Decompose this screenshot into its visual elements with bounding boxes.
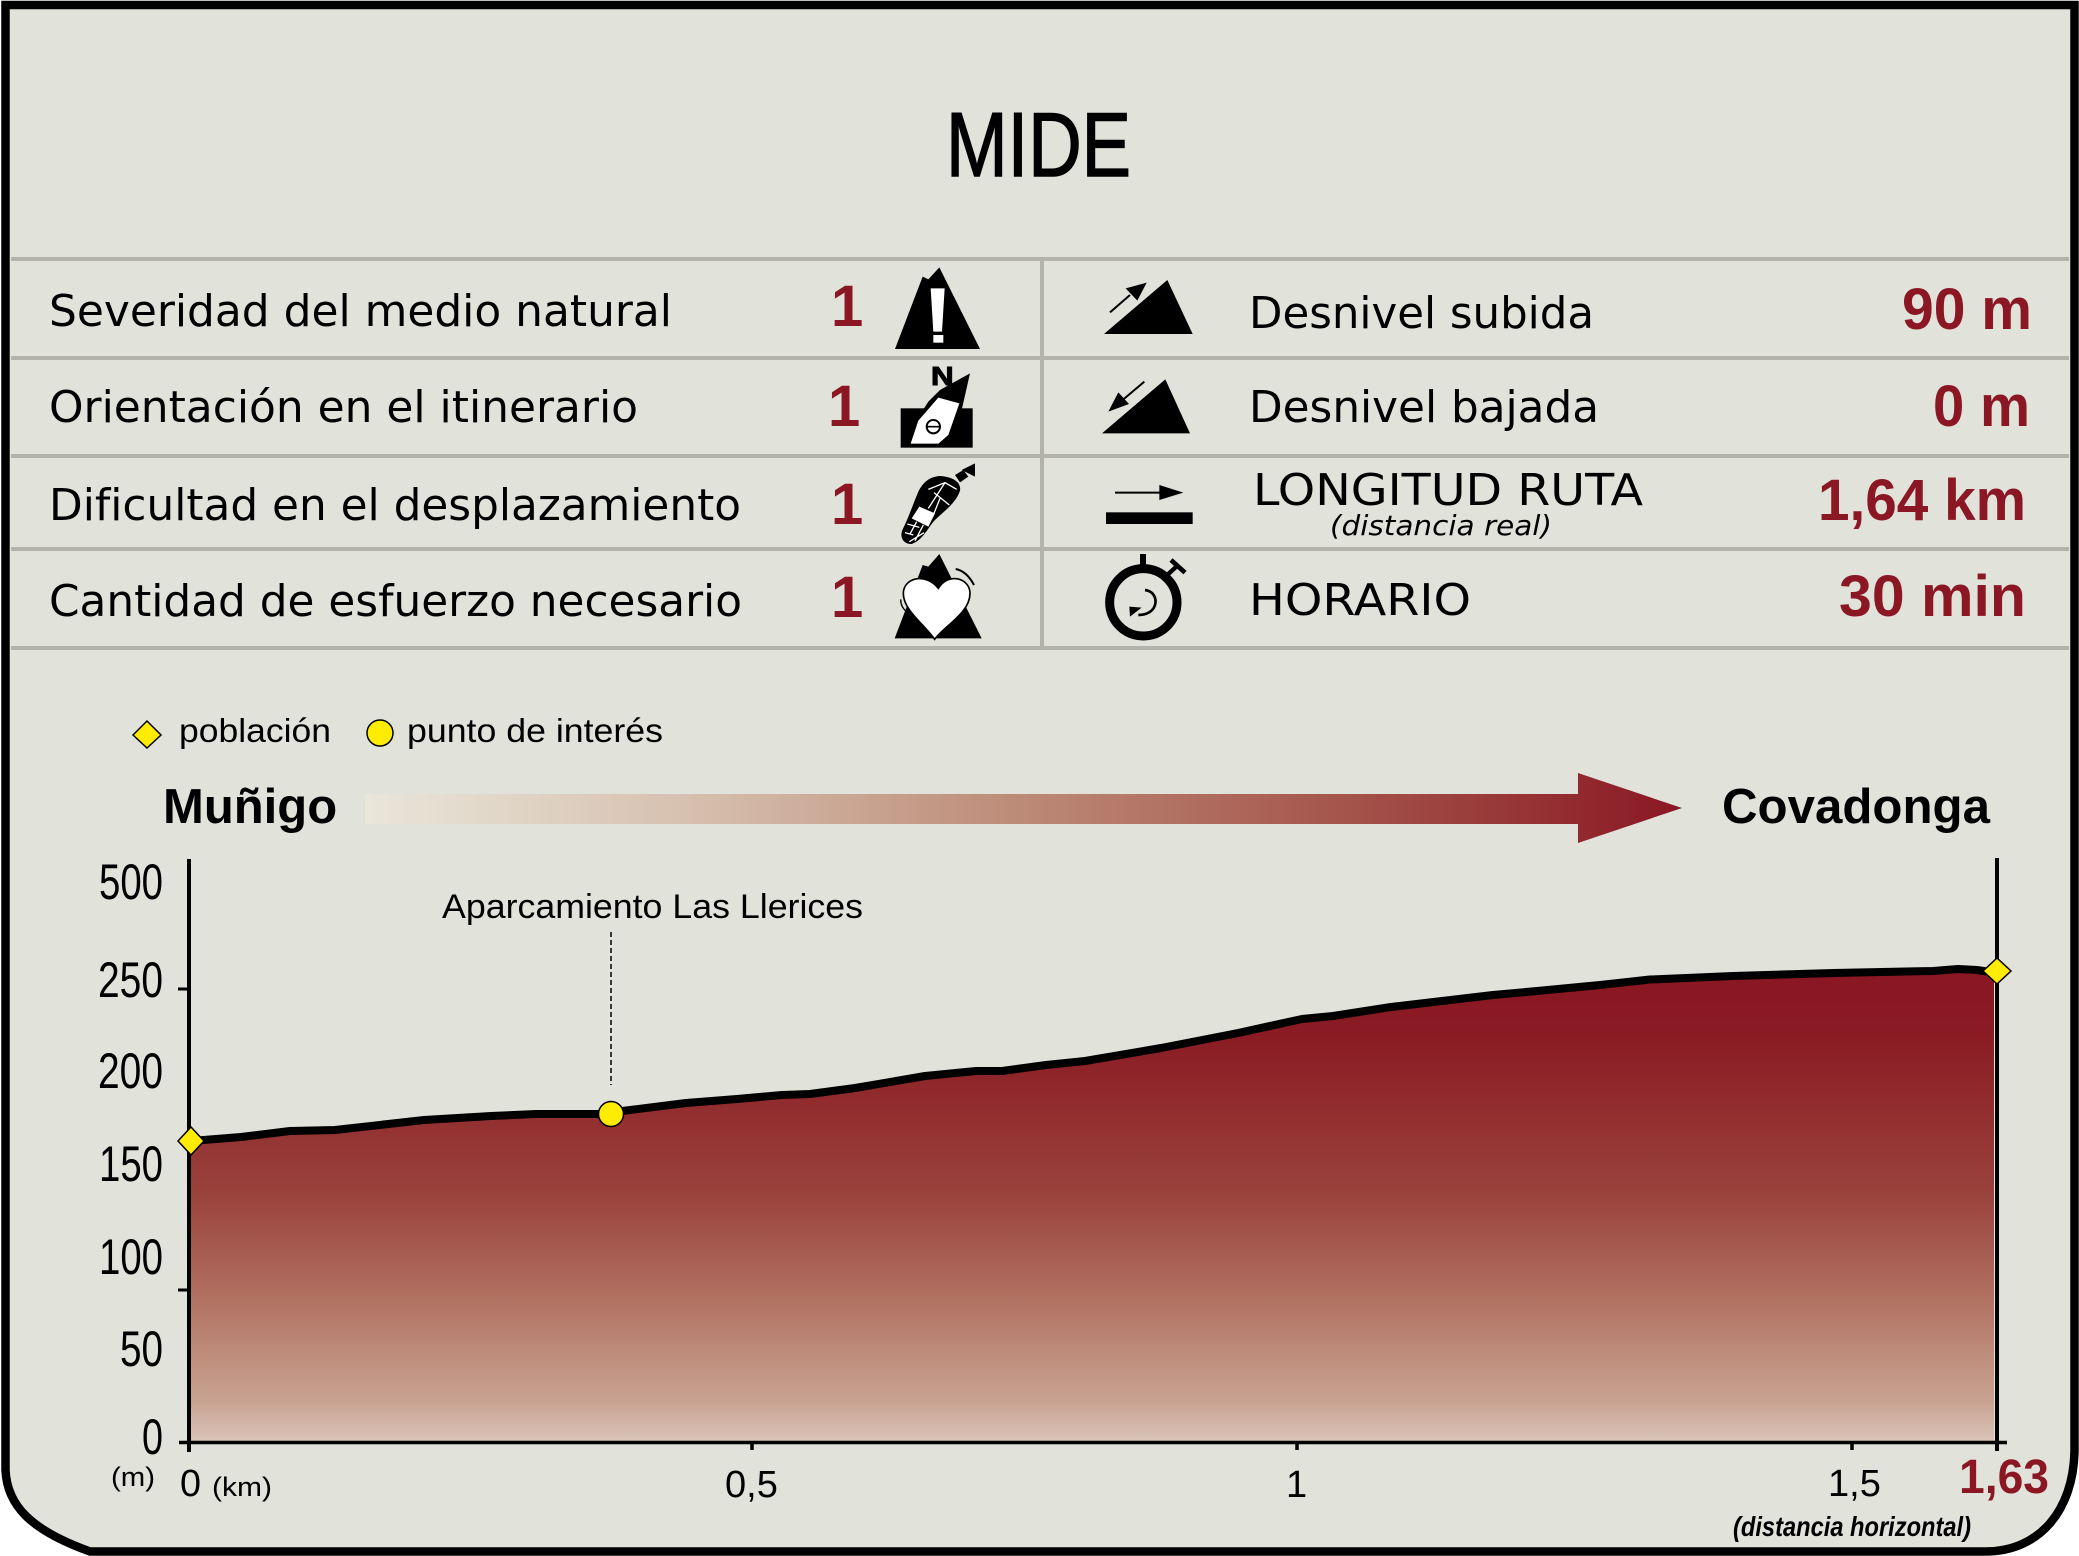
route destination: Covadonga	[1722, 780, 1991, 834]
x axis labels: 0,5	[725, 1464, 778, 1506]
value: longitud: 1,64 km	[1818, 468, 2026, 533]
panel: MIDE ratings	[49, 267, 982, 639]
profile area	[191, 969, 1994, 1441]
label: horario: HORARIO	[1249, 575, 1471, 626]
value: desnivel bajada: 0 m	[1933, 374, 2030, 439]
legend	[133, 712, 663, 749]
y axis labels: 50	[120, 1321, 163, 1377]
x axis labels: 0	[180, 1463, 201, 1505]
y axis labels: 500	[99, 854, 163, 910]
icon: compass: N	[931, 361, 954, 391]
icon: heart mountain	[895, 554, 982, 639]
label: desnivel bajada: Desnivel bajada	[1249, 382, 1599, 433]
y axis labels	[98, 854, 163, 1465]
x axis labels: 1	[1286, 1464, 1307, 1506]
y axis labels: 250	[98, 952, 163, 1008]
x axis labels: 1,5	[1828, 1463, 1881, 1505]
icon: point of interest	[367, 720, 393, 746]
arrow: route direction	[365, 773, 1682, 843]
route origin: Muñigo	[163, 780, 337, 834]
y axis labels: 150	[99, 1136, 163, 1192]
label: severidad: Severidad del medio natural	[49, 286, 672, 337]
marker: start town	[178, 1127, 204, 1155]
y axis labels: 0	[142, 1409, 163, 1465]
icon: boot sole	[901, 463, 975, 544]
label: orientacion: Orientación en el itinerario	[49, 382, 638, 433]
icon: population diamond	[133, 721, 161, 748]
label: longitud ruta: LONGITUD RUTA	[1253, 465, 1643, 516]
label: desnivel subida: Desnivel subida	[1249, 288, 1594, 339]
value: desnivel subida: 90 m	[1902, 277, 2032, 342]
label: dificultad: Dificultad en el desplazamiento	[49, 480, 741, 531]
label: distancia real: (distancia real)	[1330, 509, 1552, 542]
icon: descent	[1102, 379, 1190, 433]
axes	[178, 858, 2007, 1452]
icon: stopwatch	[1110, 554, 1185, 636]
title: MIDE	[946, 95, 1131, 196]
x axis labels	[180, 1463, 1881, 1506]
value: horario: 30 min	[1839, 564, 2026, 629]
chart: elevation profile	[98, 854, 2049, 1542]
icon: distance	[1106, 485, 1193, 524]
marker: point of interest	[598, 1102, 624, 1126]
callout: leader line	[610, 932, 612, 1085]
value: esfuerzo: 1	[831, 565, 863, 630]
total distance: 1,63	[1959, 1451, 2049, 1504]
icon: ascent	[1104, 280, 1193, 334]
profile line	[191, 969, 1997, 1141]
icon: compass	[901, 361, 973, 448]
x axis unit: (km)	[212, 1472, 272, 1502]
icon: warning mountain	[895, 267, 980, 349]
value: severidad: 1	[831, 274, 863, 339]
legend label: punto de interes: punto de interés	[407, 712, 663, 749]
label: esfuerzo: Cantidad de esfuerzo necesario	[49, 576, 742, 627]
value: dificultad: 1	[831, 472, 863, 537]
marker: end town	[1983, 958, 2011, 984]
y axis labels: 100	[99, 1229, 163, 1285]
panel: route data	[1102, 277, 2032, 636]
y axis unit: (m)	[111, 1462, 155, 1492]
callout: point of interest label: Aparcamiento Las Llerices	[442, 888, 863, 926]
y axis labels: 200	[98, 1043, 163, 1099]
legend label: poblacion: población	[179, 712, 331, 749]
value: orientacion: 1	[828, 374, 860, 439]
horizontal distance note: (distancia horizontal)	[1733, 1511, 1971, 1542]
